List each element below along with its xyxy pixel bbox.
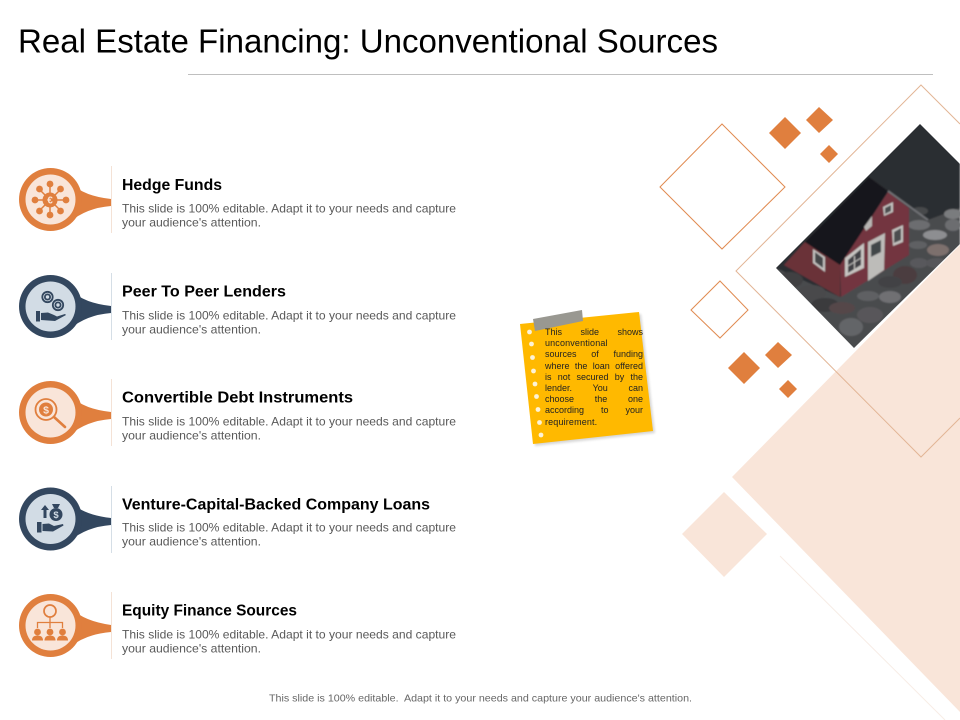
icon: money bag, arrow and hand: $ bbox=[53, 510, 59, 521]
item: Hedge Funds bbox=[19, 166, 456, 233]
outlined diamond bbox=[660, 124, 785, 249]
punched holes bbox=[527, 330, 543, 437]
small peach diamond bbox=[682, 492, 767, 577]
description: your audience's attention. bbox=[122, 215, 261, 229]
note text: choose the one bbox=[545, 394, 643, 404]
description bbox=[122, 627, 456, 655]
orange diamonds lower bbox=[728, 342, 797, 398]
item: Peer To Peer Lenders bbox=[19, 273, 456, 340]
note paper bbox=[520, 312, 653, 444]
description: This slide is 100% editable. Adapt it to your needs and capture bbox=[122, 521, 456, 535]
title: Real Estate Financing: Unconventional Sources bbox=[18, 24, 718, 60]
icon: coins above open hand bbox=[19, 275, 111, 338]
note text: requirement. bbox=[545, 417, 597, 427]
note text bbox=[545, 327, 643, 427]
description: This slide is 100% editable. Adapt it to your needs and capture bbox=[122, 627, 456, 641]
icon: network of pins with euro: € bbox=[47, 196, 53, 206]
description: This slide is 100% editable. Adapt it to your needs and capture bbox=[122, 201, 456, 215]
background peach diamond bbox=[732, 245, 960, 712]
note text: unconventional bbox=[545, 338, 608, 348]
description: your audience's attention. bbox=[122, 641, 261, 655]
icon: magnifier over dollar coin bbox=[19, 381, 111, 444]
house roof bbox=[805, 177, 888, 265]
description: your audience's attention. bbox=[122, 535, 261, 549]
heading: Hedge Funds bbox=[122, 177, 222, 194]
item: Convertible Debt Instruments bbox=[19, 379, 456, 446]
description: This slide is 100% editable. Adapt it to your needs and capture bbox=[122, 308, 456, 322]
footer note: This slide is 100% editable. Adapt it to your needs and capture your audience's attention. bbox=[269, 692, 692, 704]
orange diamonds upper bbox=[769, 107, 838, 163]
icon: network of pins with euro bbox=[19, 168, 111, 231]
icon: magnifier over dollar coin: $ bbox=[43, 404, 49, 416]
note text: according to your bbox=[545, 405, 643, 415]
note text: This slide shows bbox=[545, 327, 643, 337]
description bbox=[122, 415, 456, 443]
item: Equity Finance Sources bbox=[19, 592, 456, 659]
sticky note bbox=[520, 310, 655, 446]
description: This slide is 100% editable. Adapt it to your needs and capture bbox=[122, 415, 456, 429]
small outlined diamond bbox=[691, 281, 748, 338]
heading: Venture-Capital-Backed Company Loans bbox=[122, 496, 430, 513]
description: your audience's attention. bbox=[122, 429, 261, 443]
tape bbox=[533, 310, 583, 331]
note text: sources of funding bbox=[545, 349, 643, 359]
icon: money bag, arrow and hand bbox=[19, 488, 111, 550]
note text: lender. You can bbox=[545, 383, 643, 393]
item: Venture-Capital-Backed Company Loans bbox=[19, 486, 456, 553]
heading: Equity Finance Sources bbox=[122, 603, 297, 620]
description: your audience's attention. bbox=[122, 322, 261, 336]
note text: is not secured by the bbox=[545, 372, 643, 382]
large outlined diamond frame bbox=[736, 85, 960, 457]
note text: where the loan offered bbox=[545, 361, 643, 371]
photo: model house on coins bbox=[770, 120, 960, 355]
house walls bbox=[784, 242, 840, 297]
heading: Peer To Peer Lenders bbox=[122, 284, 286, 301]
house door and windows bbox=[868, 233, 885, 281]
icon: organisation chart bbox=[19, 594, 111, 657]
description bbox=[122, 521, 456, 549]
description bbox=[122, 201, 456, 229]
description bbox=[122, 308, 456, 336]
heading: Convertible Debt Instruments bbox=[122, 390, 353, 407]
